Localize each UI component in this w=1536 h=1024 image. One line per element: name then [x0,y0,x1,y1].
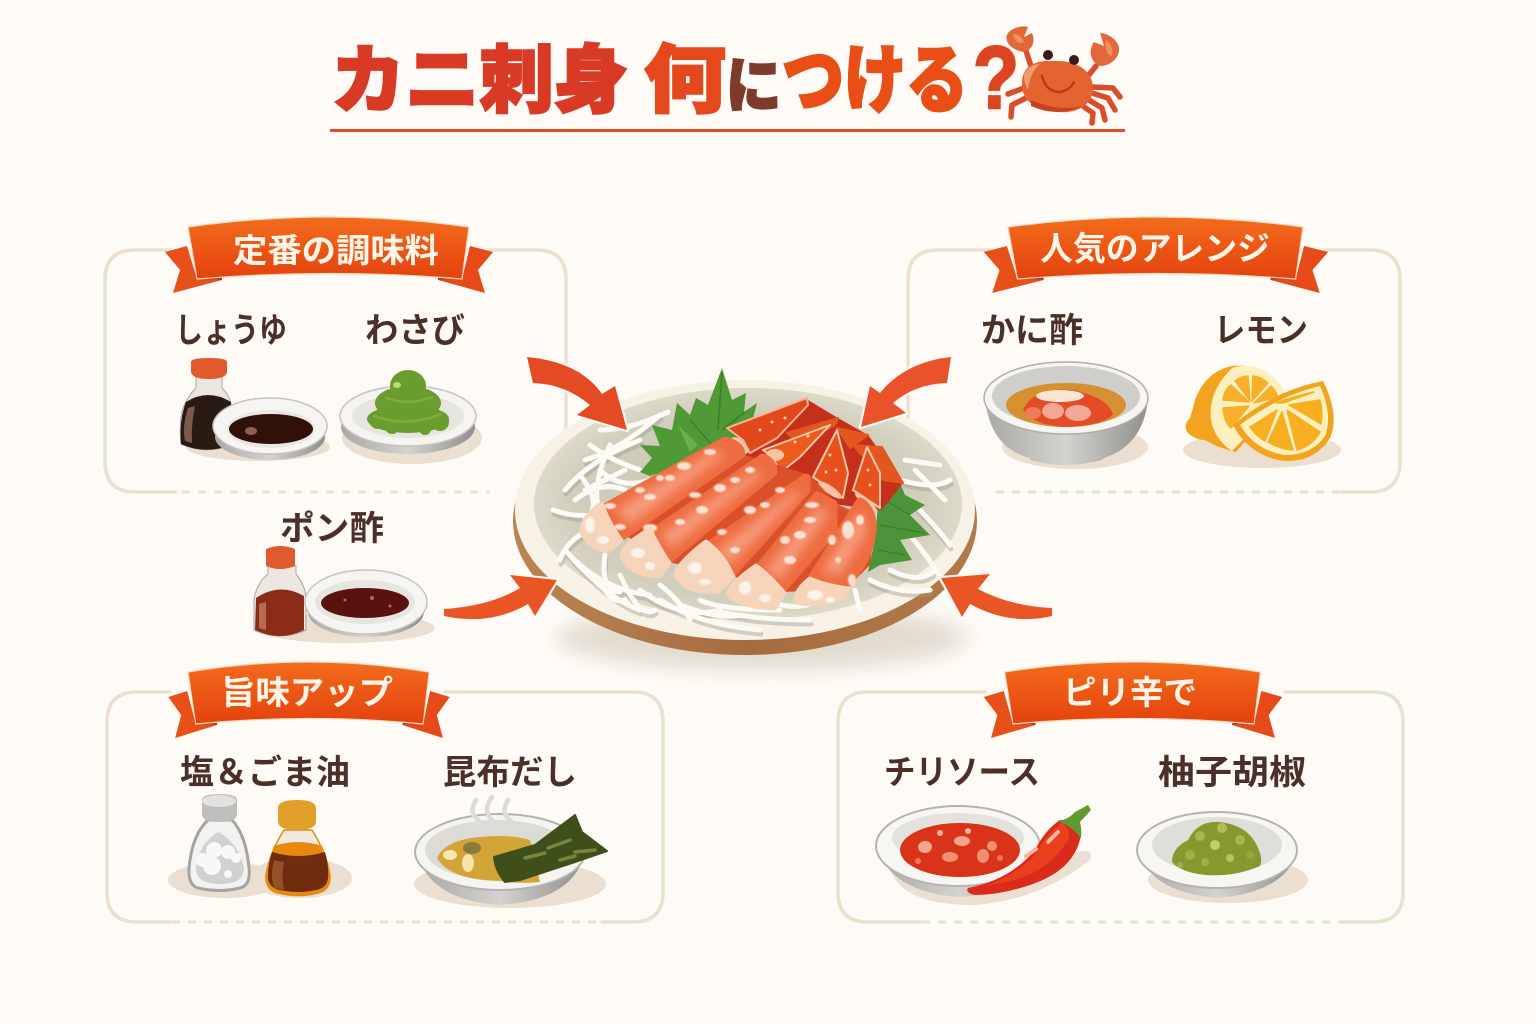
item: ポン酢 [254,510,435,643]
label: ポン酢: ポン酢 [280,510,384,548]
panel: ピリ辛で [838,662,1403,922]
title: カニ刺身 [331,39,628,122]
label: かに酢: かに酢 [981,312,1083,350]
label: 塩&ごま油: 塩＆ごま油 [180,754,350,792]
panel: 旨味アップ [107,662,663,922]
ribbon heading: ピリ辛で [984,662,1282,738]
crab meat ends [581,503,849,609]
title underline [330,129,1125,132]
label: 昆布だし: 昆布だし [443,754,577,792]
icon: chili sauce [876,805,1091,905]
icon: wasabi [340,370,482,464]
title: ? [973,28,1019,127]
ribbon heading: ピリ辛で: ピリ辛で [1063,674,1197,711]
daikon garnish [553,412,951,634]
label: 柚子胡椒: 柚子胡椒 [1158,754,1306,792]
ribbon heading: 定番の調味料 [165,217,493,293]
icon: crab [1006,26,1120,123]
shiso leaves [640,368,930,572]
plate [513,380,977,670]
ribbon heading: 人気のアレンジ [984,217,1328,293]
arrow: lower right [941,574,1052,619]
panel: 人気のアレンジ [908,217,1400,492]
arrow: upper right [861,357,951,427]
icon: salt shaker and sesame oil [168,794,352,898]
crab claws [727,398,903,514]
icon: kombu dashi [414,797,607,908]
icon: crab vinegar bowl [984,362,1148,469]
panel: 定番の調味料 [105,217,566,492]
ribbon heading: 定番の調味料: 定番の調味料 [233,232,439,269]
title: に [726,53,781,120]
crab legs [603,441,876,592]
title: 何 [644,39,726,122]
label: しょうゆ: しょうゆ [175,312,287,350]
ribbon heading: 人気のアレンジ: 人気のアレンジ [1040,230,1270,267]
icon: yuzu kosho [1137,812,1308,903]
title [331,28,1019,127]
ribbon heading: 旨味アップ: 旨味アップ [221,674,393,711]
arrow: lower left [444,575,557,619]
icon: soy sauce [180,358,330,461]
arrow: upper left [527,357,627,430]
label: わさび: わさび [365,312,465,350]
icon: lemon [1183,366,1341,468]
label: レモン: レモン [1214,312,1308,350]
center plate with crab sashimi [513,368,977,670]
title: つける [782,39,968,122]
label: チリソース: チリソース [884,754,1040,792]
icon: ponzu bottle and dish [254,546,435,643]
ribbon heading: 旨味アップ [168,662,450,738]
